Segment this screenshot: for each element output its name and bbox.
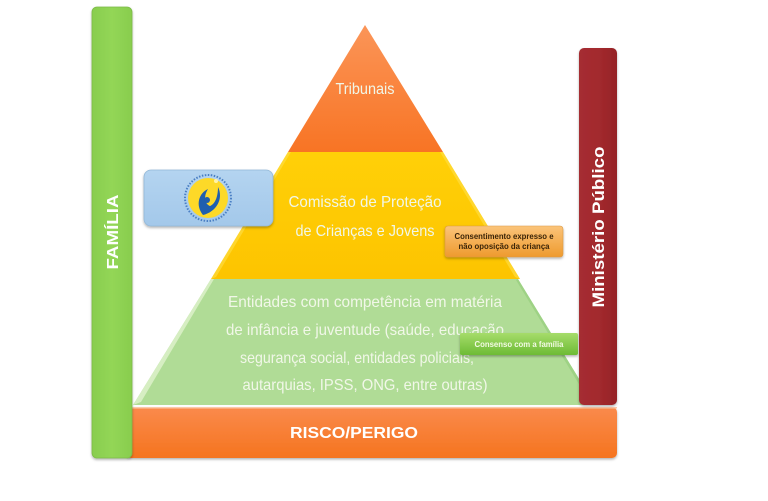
- infographic: segurança social, entidades policiais,: [240, 350, 474, 367]
- label: Tribunais: Tribunais: [336, 81, 394, 98]
- bar: FAMÍLIA: [92, 7, 132, 458]
- pyramid tier: Comissão de Proteção: [211, 152, 520, 279]
- infographic: de Crianças e Jovens: [296, 223, 434, 240]
- callout: logo box: [144, 170, 273, 226]
- infographic: não oposição da criança: [458, 242, 550, 251]
- callout: Consenso com a família: [460, 333, 578, 355]
- callout: Consentimento expresso: [445, 226, 563, 257]
- label: FAMÍLIA: FAMÍLIA: [103, 194, 122, 270]
- label: Comissão de Proteção de Crianças e Jovens: Comissão de Proteção: [288, 194, 442, 211]
- infographic: autarquias, IPSS, ONG, entre outras): [242, 377, 488, 394]
- label: Ministério Público: Ministério Público: [589, 146, 608, 308]
- label: RISCO/PERIGO: RISCO/PERIGO: [290, 425, 418, 442]
- pyramid tier: Entidades: [133, 279, 595, 405]
- bar: RISCO/PERIGO: [126, 407, 617, 458]
- label: Consenso: Consenso com a família: [474, 340, 564, 349]
- infographic: de infância e juventude (saúde, educação: [226, 322, 504, 339]
- label: Entidades text: Entidades com competência em matéria: [228, 294, 502, 311]
- bar: Ministério Público: [579, 48, 617, 405]
- label: Consentimento: Consentimento expresso e: [454, 232, 554, 241]
- icon: logo: [185, 175, 231, 221]
- pyramid tier: Tribunais: [288, 25, 443, 152]
